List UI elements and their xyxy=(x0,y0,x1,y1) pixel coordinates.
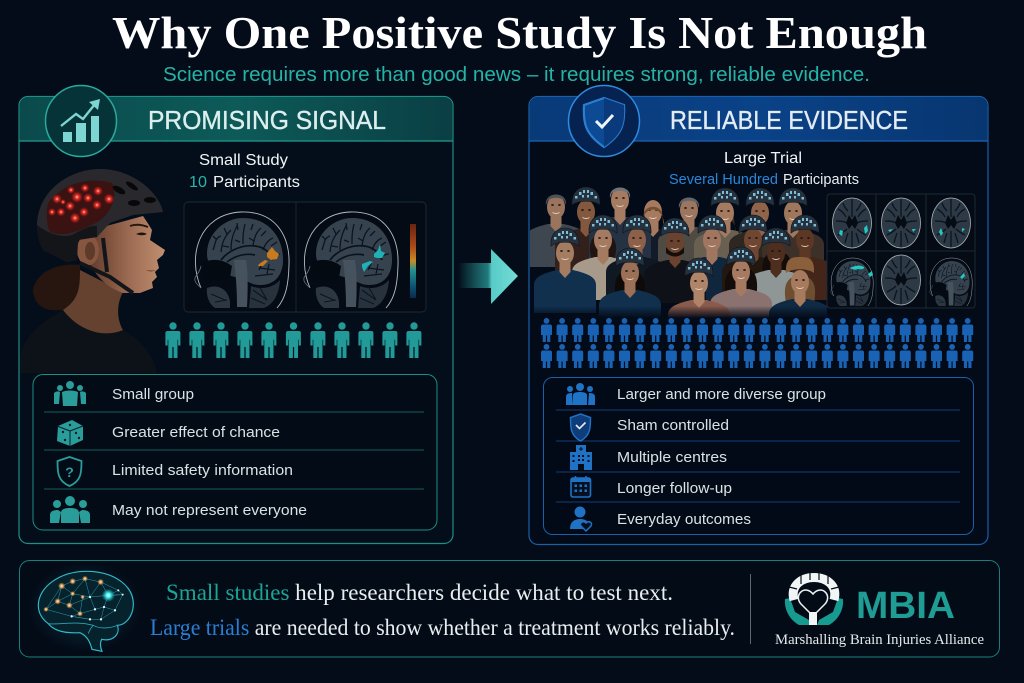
row: everyday outcomes: Everyday outcomes xyxy=(617,511,751,528)
logo: MBIA xyxy=(775,571,984,648)
title: Why One Positive Study Is Not Enough xyxy=(112,7,927,58)
panel: reliable evidence xyxy=(525,86,988,544)
heading: reliable evidence: RELIABLE EVIDENCE xyxy=(670,105,908,135)
panel: promising signal xyxy=(19,86,453,544)
row: sham controlled: Sham controlled xyxy=(617,417,729,434)
large trial label xyxy=(669,150,859,188)
participant icons: 10 participants row xyxy=(165,322,421,358)
row: safety: ? xyxy=(65,464,74,480)
takeaway text: Small studies help researchers decide what to test next. xyxy=(166,580,673,605)
small study label: Participants xyxy=(213,174,300,191)
logo: MBIA: Marshalling Brain Injuries Alliance xyxy=(775,632,984,648)
list: strengths of large trial xyxy=(544,378,974,534)
small study label xyxy=(189,152,300,191)
panel: takeaway footer xyxy=(20,560,1000,657)
row: safety xyxy=(58,457,293,486)
logo: MBIA: MBIA xyxy=(856,585,955,627)
row: represent xyxy=(50,496,307,523)
row: sham controlled xyxy=(570,414,729,441)
row: safety: Limited safety information xyxy=(112,462,293,479)
row: multiple centres xyxy=(570,445,727,470)
takeaway text: Large trials are needed to show whether a treatment works reliably. xyxy=(150,615,735,640)
header band: reliable evidence xyxy=(530,97,987,141)
subtitle: Science requires more than good news – it requires strong, reliable evidence. xyxy=(163,64,870,86)
row: chance xyxy=(57,420,280,446)
list: limitations of small study xyxy=(33,374,437,530)
illustration: woman wearing LED helmet xyxy=(20,169,165,373)
heading: promising signal: PROMISING SIGNAL xyxy=(148,105,386,135)
row: diverse group: Larger and more diverse group xyxy=(617,386,826,403)
icon: shield with check xyxy=(568,86,640,156)
participant icons: large trial rows xyxy=(541,318,973,368)
large trial label: Large Trial xyxy=(724,150,802,167)
logo mark: hands, heart and brain xyxy=(785,571,843,625)
small study label: 10 xyxy=(189,174,207,191)
MRI scans with colour bar xyxy=(184,202,426,312)
takeaway text xyxy=(150,580,735,640)
row: small group xyxy=(54,381,194,406)
row: diverse group xyxy=(566,383,826,405)
row: chance: Greater effect of chance xyxy=(112,424,280,441)
large trial label: Several Hundred xyxy=(669,172,778,188)
MRI scan grid xyxy=(827,194,975,308)
row: everyday outcomes xyxy=(570,506,751,531)
large trial label: Participants xyxy=(783,172,859,188)
icon: rising bar chart xyxy=(46,86,116,156)
row: longer follow-up xyxy=(571,476,732,497)
small study label: Small Study xyxy=(199,152,288,169)
row: represent: May not represent everyone xyxy=(112,502,307,519)
row: multiple centres: Multiple centres xyxy=(617,449,727,466)
illustration: diverse crowd of trial participants xyxy=(530,187,827,318)
icon: glowing brain network xyxy=(28,562,142,652)
header band: promising signal xyxy=(20,97,452,141)
arrow xyxy=(458,249,518,304)
row: longer follow-up: Longer follow-up xyxy=(617,480,732,497)
row: small group: Small group xyxy=(112,386,194,403)
